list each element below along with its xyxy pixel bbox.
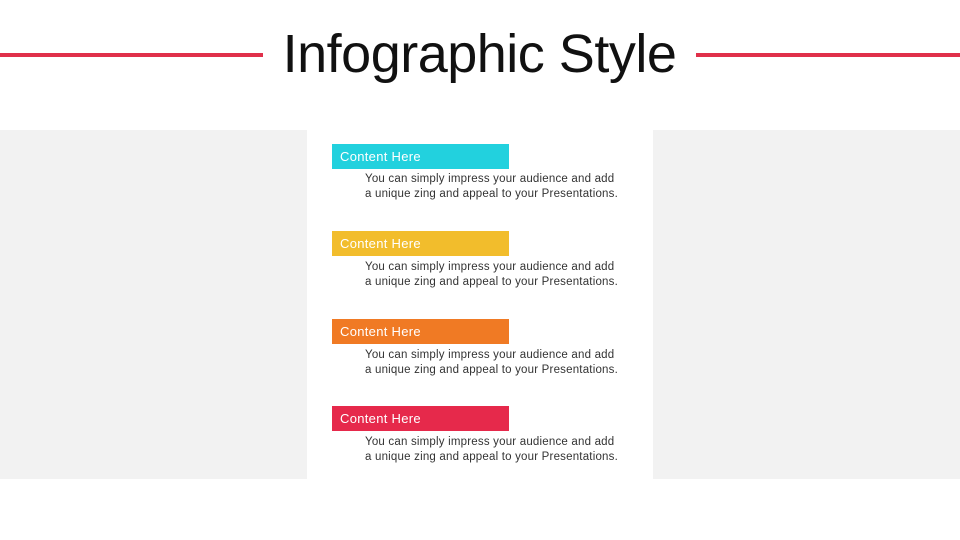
tag 1: Content Here (340, 149, 421, 164)
tag 3: Content Here (340, 324, 421, 339)
text 1 (365, 173, 618, 200)
text 1: a unique zing and appeal to your Presentations. (365, 188, 618, 200)
text 4: You can simply impress your audience and add (365, 436, 614, 448)
text 2: You can simply impress your audience and add (365, 261, 614, 273)
item 1 (332, 144, 618, 200)
tag 4: Content Here (340, 411, 421, 426)
tag 1 (332, 144, 509, 169)
title: Infographic Style (283, 24, 676, 84)
text 3 (365, 349, 618, 376)
text 3: a unique zing and appeal to your Presentations. (365, 364, 618, 376)
item 3 (332, 319, 618, 376)
text 2: a unique zing and appeal to your Presentations. (365, 276, 618, 288)
tag 2 (332, 231, 509, 256)
tag 4 (332, 406, 509, 431)
item 2 (332, 231, 618, 288)
text 2 (365, 261, 618, 288)
panel: right gray (653, 130, 960, 479)
text 1: You can simply impress your audience and add (365, 173, 614, 185)
tag 2: Content Here (340, 236, 421, 251)
item 4 (332, 406, 618, 463)
text 3: You can simply impress your audience and add (365, 349, 614, 361)
text 4: a unique zing and appeal to your Presentations. (365, 451, 618, 463)
text 4 (365, 436, 618, 463)
panel: left gray (0, 130, 307, 479)
tag 3 (332, 319, 509, 344)
